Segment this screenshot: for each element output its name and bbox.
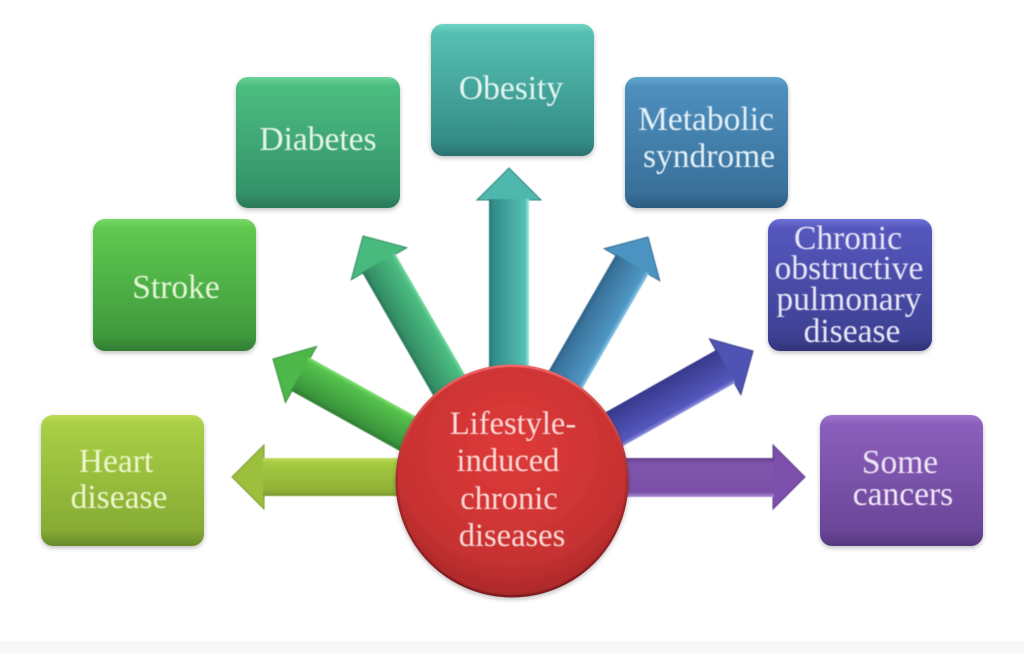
label: some cancers: cancers bbox=[853, 476, 953, 513]
arrow: to obesity bbox=[477, 168, 541, 374]
label: obesity: Obesity bbox=[459, 70, 563, 107]
center circle: lifestyle-induced chronic diseases bbox=[396, 364, 628, 598]
label: heart disease: disease bbox=[71, 479, 167, 516]
label: metabolic syndrome: syndrome bbox=[643, 138, 775, 175]
label: metabolic syndrome: Metabolic bbox=[638, 101, 774, 138]
panel: obesity bbox=[431, 24, 594, 156]
arrow: to stroke bbox=[257, 331, 442, 472]
panel: stroke bbox=[93, 219, 256, 351]
label: chronic obstructive pulmonary disease: disease bbox=[804, 313, 900, 350]
arrow: to diabetes bbox=[335, 220, 479, 404]
panel: metabolic syndrome bbox=[625, 77, 788, 208]
label: center circle: chronic bbox=[460, 481, 558, 517]
arrow: to chronic obstructive pulmonary disease bbox=[588, 323, 769, 463]
panel: some cancers bbox=[820, 415, 983, 546]
panel: chronic obstructive pulmonary disease bbox=[768, 219, 932, 351]
panel: heart disease bbox=[41, 415, 204, 546]
label: some cancers: Some bbox=[862, 444, 938, 481]
label: center circle: diseases bbox=[459, 518, 565, 554]
label: stroke: Stroke bbox=[132, 269, 220, 306]
label: diabetes: Diabetes bbox=[259, 121, 377, 158]
arrow: to heart disease bbox=[232, 445, 403, 509]
label: center circle: induced bbox=[457, 443, 559, 479]
arrow: to metabolic syndrome bbox=[535, 221, 676, 401]
label: chronic obstructive pulmonary disease: pulmonary bbox=[776, 281, 922, 318]
label: chronic obstructive pulmonary disease: Chronic bbox=[794, 220, 902, 257]
panel: diabetes bbox=[236, 77, 400, 208]
arrow: to some cancers bbox=[624, 445, 805, 509]
label: heart disease: Heart bbox=[79, 443, 154, 480]
label: center circle: Lifestyle- bbox=[450, 406, 576, 442]
label: chronic obstructive pulmonary disease: obstructive bbox=[775, 250, 923, 287]
bottom band bbox=[0, 641, 1024, 653]
